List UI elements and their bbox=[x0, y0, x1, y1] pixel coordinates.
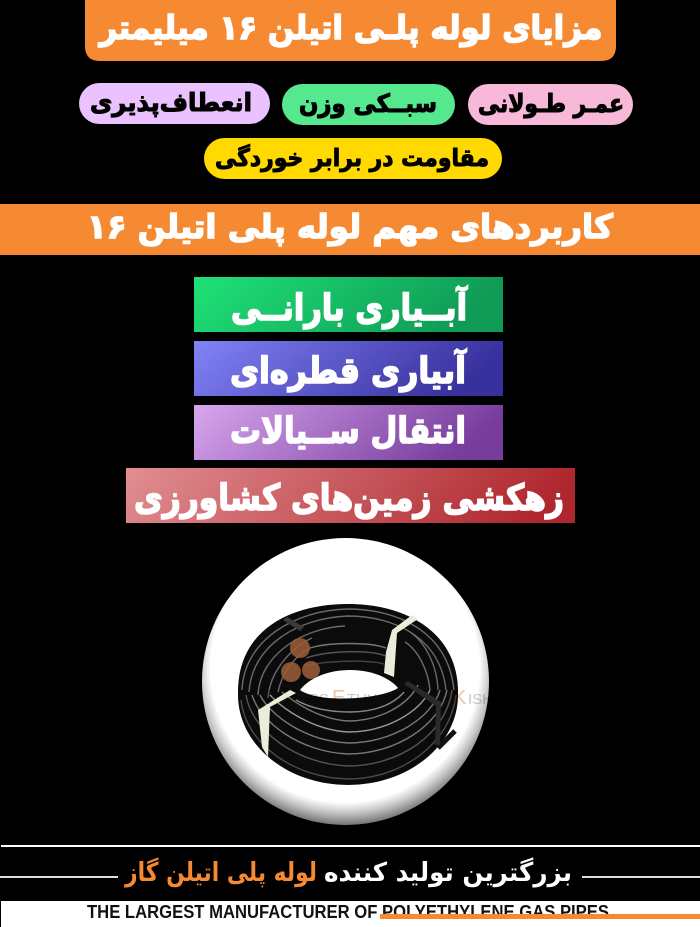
pill: corrosion resistance bbox=[204, 138, 502, 179]
application bar: sprinkler irrigation bbox=[194, 277, 503, 332]
top footer rule bbox=[1, 845, 700, 847]
watermark: company name: P bbox=[266, 687, 279, 709]
application bar: drip irrigation: آبیاری قطره‌ای bbox=[230, 348, 467, 392]
dark strap: lower right bbox=[404, 681, 441, 745]
footer slogan: Persian: بزرگترین تولید کننده bbox=[324, 857, 572, 888]
section band: important applications: کاربردهای مهم لوله پلی اتیلن ۱۶ bbox=[87, 207, 614, 247]
pipe free end bbox=[438, 731, 455, 748]
title banner: advantages of 16mm polyethylene pipe: مزایای لوله پلـی اتیلن ۱۶ میلیمتر bbox=[98, 8, 603, 48]
application bar: agricultural land drainage: زهکشی زمین‌های کشاورزی bbox=[134, 478, 564, 519]
footer white strip bbox=[1, 901, 700, 927]
pill: flexibility bbox=[79, 83, 270, 124]
pill: light weight bbox=[282, 84, 455, 125]
footer slogan: English: THE LARGEST MANUFACTURER OF POLYETHYLENE GAS PIPES bbox=[87, 902, 609, 922]
watermark: company name: K bbox=[453, 687, 467, 709]
watermark: company name: RS bbox=[308, 691, 329, 708]
dark strap: upper left bbox=[283, 617, 304, 631]
watermark: company name bbox=[266, 687, 493, 709]
pill: light weight: سبــکی وزن bbox=[299, 89, 437, 119]
application bar: fluid transfer: انتقال ســیالات bbox=[230, 411, 466, 452]
footer slogan: Persian bbox=[123, 857, 572, 888]
footer slogan: Persian: لوله پلی اتیلن گاز bbox=[123, 857, 317, 888]
pill: corrosion resistance: مقاومت در برابر خوردگی bbox=[215, 144, 489, 172]
product photo: pipe coil in white circle bbox=[202, 538, 493, 825]
watermark: company name: THY bbox=[347, 691, 377, 708]
right footer line bbox=[582, 876, 700, 878]
pill: long life bbox=[468, 84, 633, 125]
title banner: advantages of 16mm polyethylene pipe bbox=[85, 0, 616, 61]
application bar: agricultural land drainage bbox=[126, 468, 575, 523]
watermark: company name: E bbox=[332, 687, 345, 709]
coil centre opening bbox=[300, 670, 398, 699]
left footer line bbox=[0, 876, 118, 878]
section band: important applications bbox=[0, 204, 700, 255]
icon: black pipe coil bbox=[238, 604, 458, 785]
strap: lower left label bbox=[258, 690, 296, 757]
pill: flexibility: انعطاف‌پذیری bbox=[90, 88, 252, 118]
icon: brown logo circles bbox=[281, 638, 320, 682]
application bar: fluid transfer bbox=[194, 405, 503, 460]
watermark: company name: ISH bbox=[468, 691, 493, 708]
application bar: sprinkler irrigation: آبــیاری بارانــی bbox=[231, 285, 468, 329]
strap: upper right label bbox=[384, 615, 418, 677]
pill: long life: عمـر طـولانی bbox=[478, 89, 624, 119]
application bar: drip irrigation bbox=[194, 341, 503, 396]
orange accent bar bbox=[380, 914, 700, 919]
